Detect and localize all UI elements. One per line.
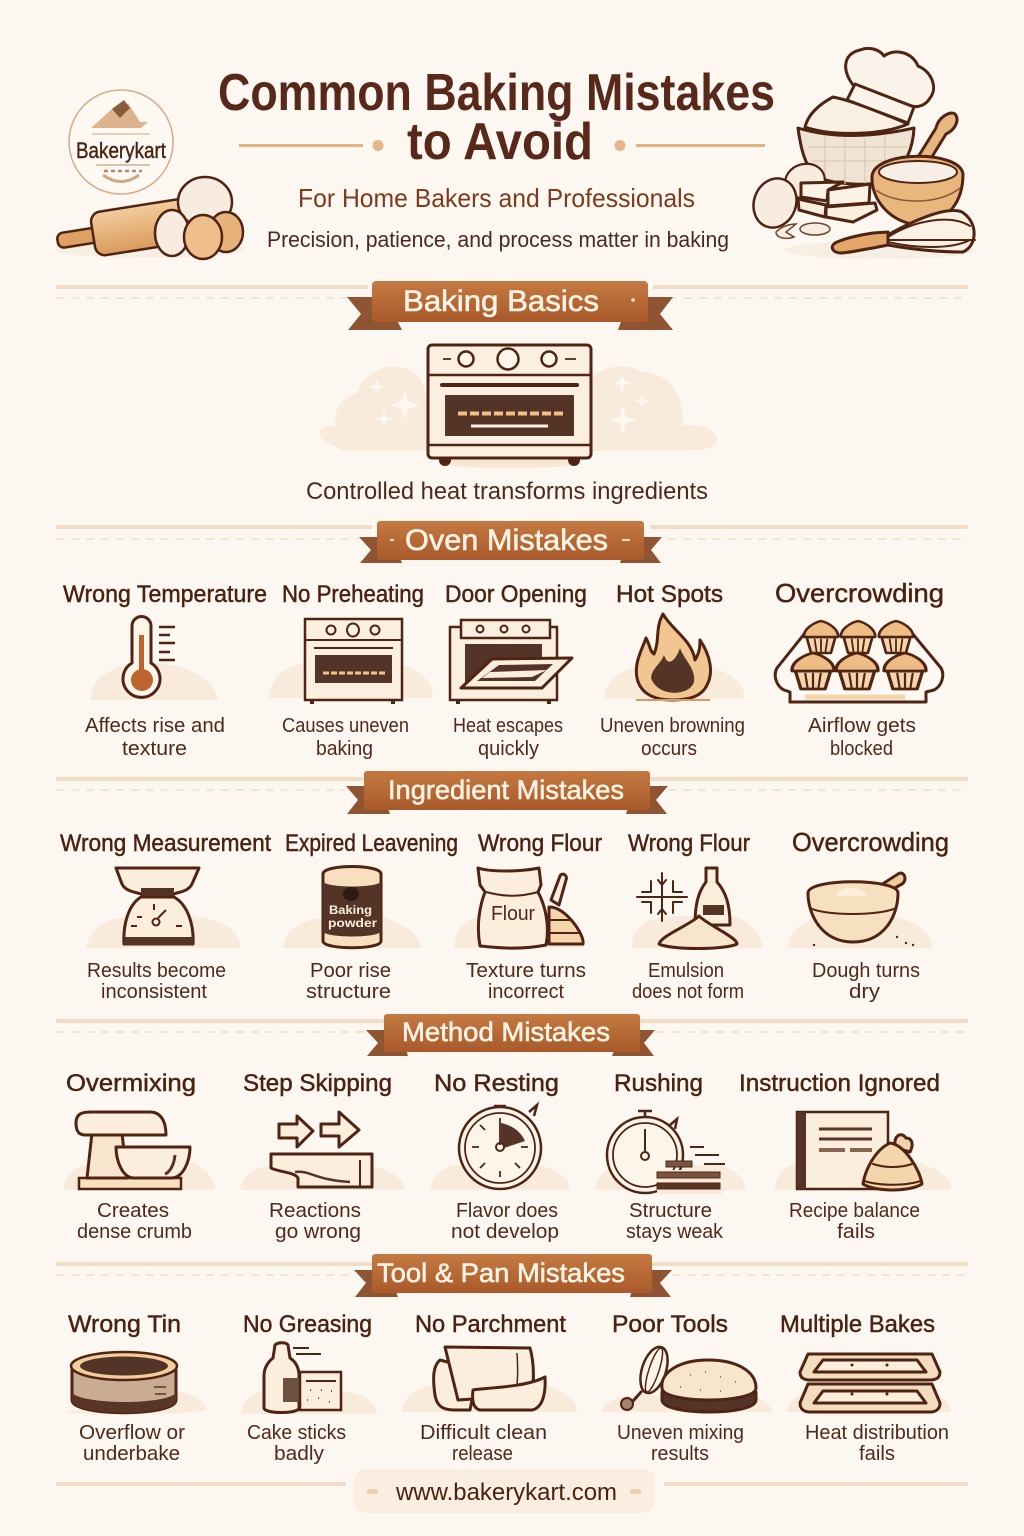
column: no greasing: Cake sticks: [247, 1422, 346, 1444]
column: no greasing: badly: [274, 1443, 324, 1465]
column: wrong flour bag: incorrect: [488, 981, 564, 1003]
column: instruction ignored: [739, 1070, 951, 1243]
column: no parchment: [402, 1311, 577, 1465]
column: step skipping: Step Skipping: [243, 1070, 392, 1097]
section rule: ingredient mistakes: [56, 777, 968, 790]
column: wrong tin: [63, 1311, 206, 1465]
ribbon heading: method mistakes: Method Mistakes: [402, 1017, 610, 1047]
column: wrong temperature: [63, 581, 267, 760]
column: overmixing: Creates: [97, 1200, 169, 1222]
column: poor tools: Poor Tools: [612, 1311, 728, 1338]
column: no preheating: [269, 581, 433, 760]
illustration: oven with heat clouds: [320, 345, 717, 468]
column: no resting: No Resting: [434, 1070, 559, 1097]
ribbon heading: baking basics: Baking Basics: [403, 285, 599, 318]
footer: website pill: www.bakerykart.com: [395, 1479, 617, 1506]
ribbon heading: method mistakes: [366, 1014, 655, 1056]
column: poor tools: Uneven mixing: [617, 1422, 744, 1444]
title ornaments: [239, 140, 765, 151]
column: wrong flour bag: [454, 830, 602, 1003]
caption: oven: Controlled heat transforms ingredients: [306, 478, 708, 505]
column: step skipping: [240, 1070, 404, 1243]
section rule: method mistakes: [56, 1019, 968, 1032]
column: overcrowding dough bowl: Dough turns: [812, 960, 920, 982]
column: rushing: stays weak: [626, 1221, 724, 1243]
ribbon heading: ingredient mistakes: [346, 771, 668, 814]
column: wrong temperature: Wrong Temperature: [63, 581, 267, 608]
header: logo badge: Bakerykart: [76, 138, 166, 163]
column: door opening: Door Opening: [445, 581, 587, 608]
column: wrong tin: underbake: [83, 1443, 180, 1465]
column: wrong temperature: Affects rise and: [85, 715, 225, 737]
column: expired leavening: Expired Leavening: [285, 830, 458, 857]
section rule: tool and pan mistakes: [56, 1262, 968, 1275]
column: overmixing: Overmixing: [66, 1070, 196, 1097]
ribbon heading: ingredient mistakes: Ingredient Mistakes: [388, 775, 624, 805]
ribbon heading: oven mistakes: [359, 521, 662, 563]
column: wrong flour snowflake and bottle: Wrong Flour: [628, 830, 750, 857]
column: multiple bakes: Heat distribution: [805, 1422, 949, 1444]
column: multiple bakes: fails: [859, 1443, 895, 1465]
title: to Avoid: [407, 113, 593, 171]
column: wrong flour snowflake and bottle: Emulsion: [648, 960, 724, 982]
column: overcrowding dough bowl: [788, 827, 949, 1003]
column: door opening: [445, 581, 587, 760]
column: instruction ignored: Instruction Ignored: [739, 1070, 940, 1097]
column: wrong measurement: Results become: [87, 960, 226, 982]
column: rushing: Structure: [629, 1200, 712, 1222]
column: no greasing: No Greasing: [243, 1311, 372, 1338]
column: overmixing: [63, 1070, 215, 1243]
column: no parchment: No Parchment: [415, 1311, 566, 1338]
column: rushing: Rushing: [614, 1070, 703, 1097]
column: hot spots: occurs: [641, 738, 697, 760]
column: expired leavening: powder: [328, 916, 377, 930]
column: step skipping: Reactions: [269, 1200, 361, 1222]
subtitle: For Home Bakers and Professionals: [298, 183, 695, 213]
footer rules: [56, 1482, 968, 1486]
column: overcrowding oven: Airflow gets: [808, 715, 916, 737]
footer: website pill: [354, 1469, 655, 1513]
column: poor tools: [601, 1311, 772, 1465]
column: hot spots: [600, 581, 745, 760]
header: baking ingredients illustration: [747, 48, 975, 259]
column: no resting: [430, 1070, 570, 1243]
title: [218, 64, 775, 171]
column: wrong measurement: [60, 830, 271, 1003]
column: no greasing: [241, 1311, 377, 1465]
column: instruction ignored: fails: [837, 1221, 875, 1243]
column: overcrowding oven: blocked: [830, 738, 893, 760]
column: no preheating: Causes uneven: [282, 715, 409, 737]
column: wrong measurement: inconsistent: [101, 981, 207, 1003]
column: hot spots: Hot Spots: [616, 581, 723, 608]
ribbon heading: baking basics: [347, 281, 673, 330]
section rule: oven mistakes: [56, 525, 968, 539]
tagline: Precision, patience, and process matter in baking: [267, 227, 729, 252]
column: expired leavening: structure: [306, 981, 391, 1003]
column: wrong flour snowflake and bottle: does not form: [632, 981, 744, 1003]
column: wrong flour bag: Wrong Flour: [478, 830, 602, 857]
section rule: baking basics: [56, 285, 968, 298]
column: poor tools: results: [651, 1443, 709, 1465]
column: hot spots: Uneven browning: [600, 715, 745, 737]
ribbon heading: tool and pan mistakes: Tool & Pan Mistakes: [377, 1258, 625, 1288]
column: wrong tin: Wrong Tin: [68, 1311, 181, 1338]
column: no preheating: baking: [316, 738, 373, 760]
column: wrong flour bag: Flour: [491, 903, 535, 925]
column: no resting: not develop: [451, 1221, 559, 1243]
column: wrong flour bag: Texture turns: [466, 960, 586, 982]
column: wrong tin: Overflow or: [79, 1422, 185, 1444]
column: door opening: quickly: [478, 738, 539, 760]
column: expired leavening: [283, 830, 458, 1003]
column: wrong measurement: Wrong Measurement: [60, 830, 271, 857]
header: logo badge: [69, 90, 173, 194]
column: no parchment: release: [452, 1443, 513, 1465]
column: door opening: Heat escapes: [453, 715, 563, 737]
ribbon heading: oven mistakes: Oven Mistakes: [405, 524, 608, 557]
column: step skipping: go wrong: [275, 1221, 361, 1243]
column: expired leavening: Baking: [329, 903, 372, 917]
column: no resting: Flavor does: [456, 1200, 558, 1222]
column: expired leavening: Poor rise: [310, 960, 391, 982]
column: rushing: [595, 1070, 745, 1243]
column: wrong temperature: texture: [122, 738, 187, 760]
ribbon heading: tool and pan mistakes: [354, 1254, 672, 1297]
column: multiple bakes: Multiple Bakes: [780, 1311, 935, 1338]
column: no parchment: Difficult clean: [420, 1422, 547, 1444]
title: Common Baking Mistakes: [218, 64, 775, 122]
column: overmixing: dense crumb: [77, 1221, 192, 1243]
column: overcrowding dough bowl: dry: [849, 981, 880, 1003]
header: rolling pin and eggs: [54, 177, 245, 262]
column: instruction ignored: Recipe balance: [789, 1200, 920, 1222]
column: overcrowding oven: Overcrowding: [775, 578, 944, 608]
column: multiple bakes: [780, 1311, 951, 1465]
column: wrong flour snowflake and bottle: [628, 830, 762, 1003]
column: overcrowding dough bowl: Overcrowding: [792, 827, 949, 857]
column: overcrowding oven: [775, 578, 944, 760]
column: no preheating: No Preheating: [282, 581, 424, 608]
